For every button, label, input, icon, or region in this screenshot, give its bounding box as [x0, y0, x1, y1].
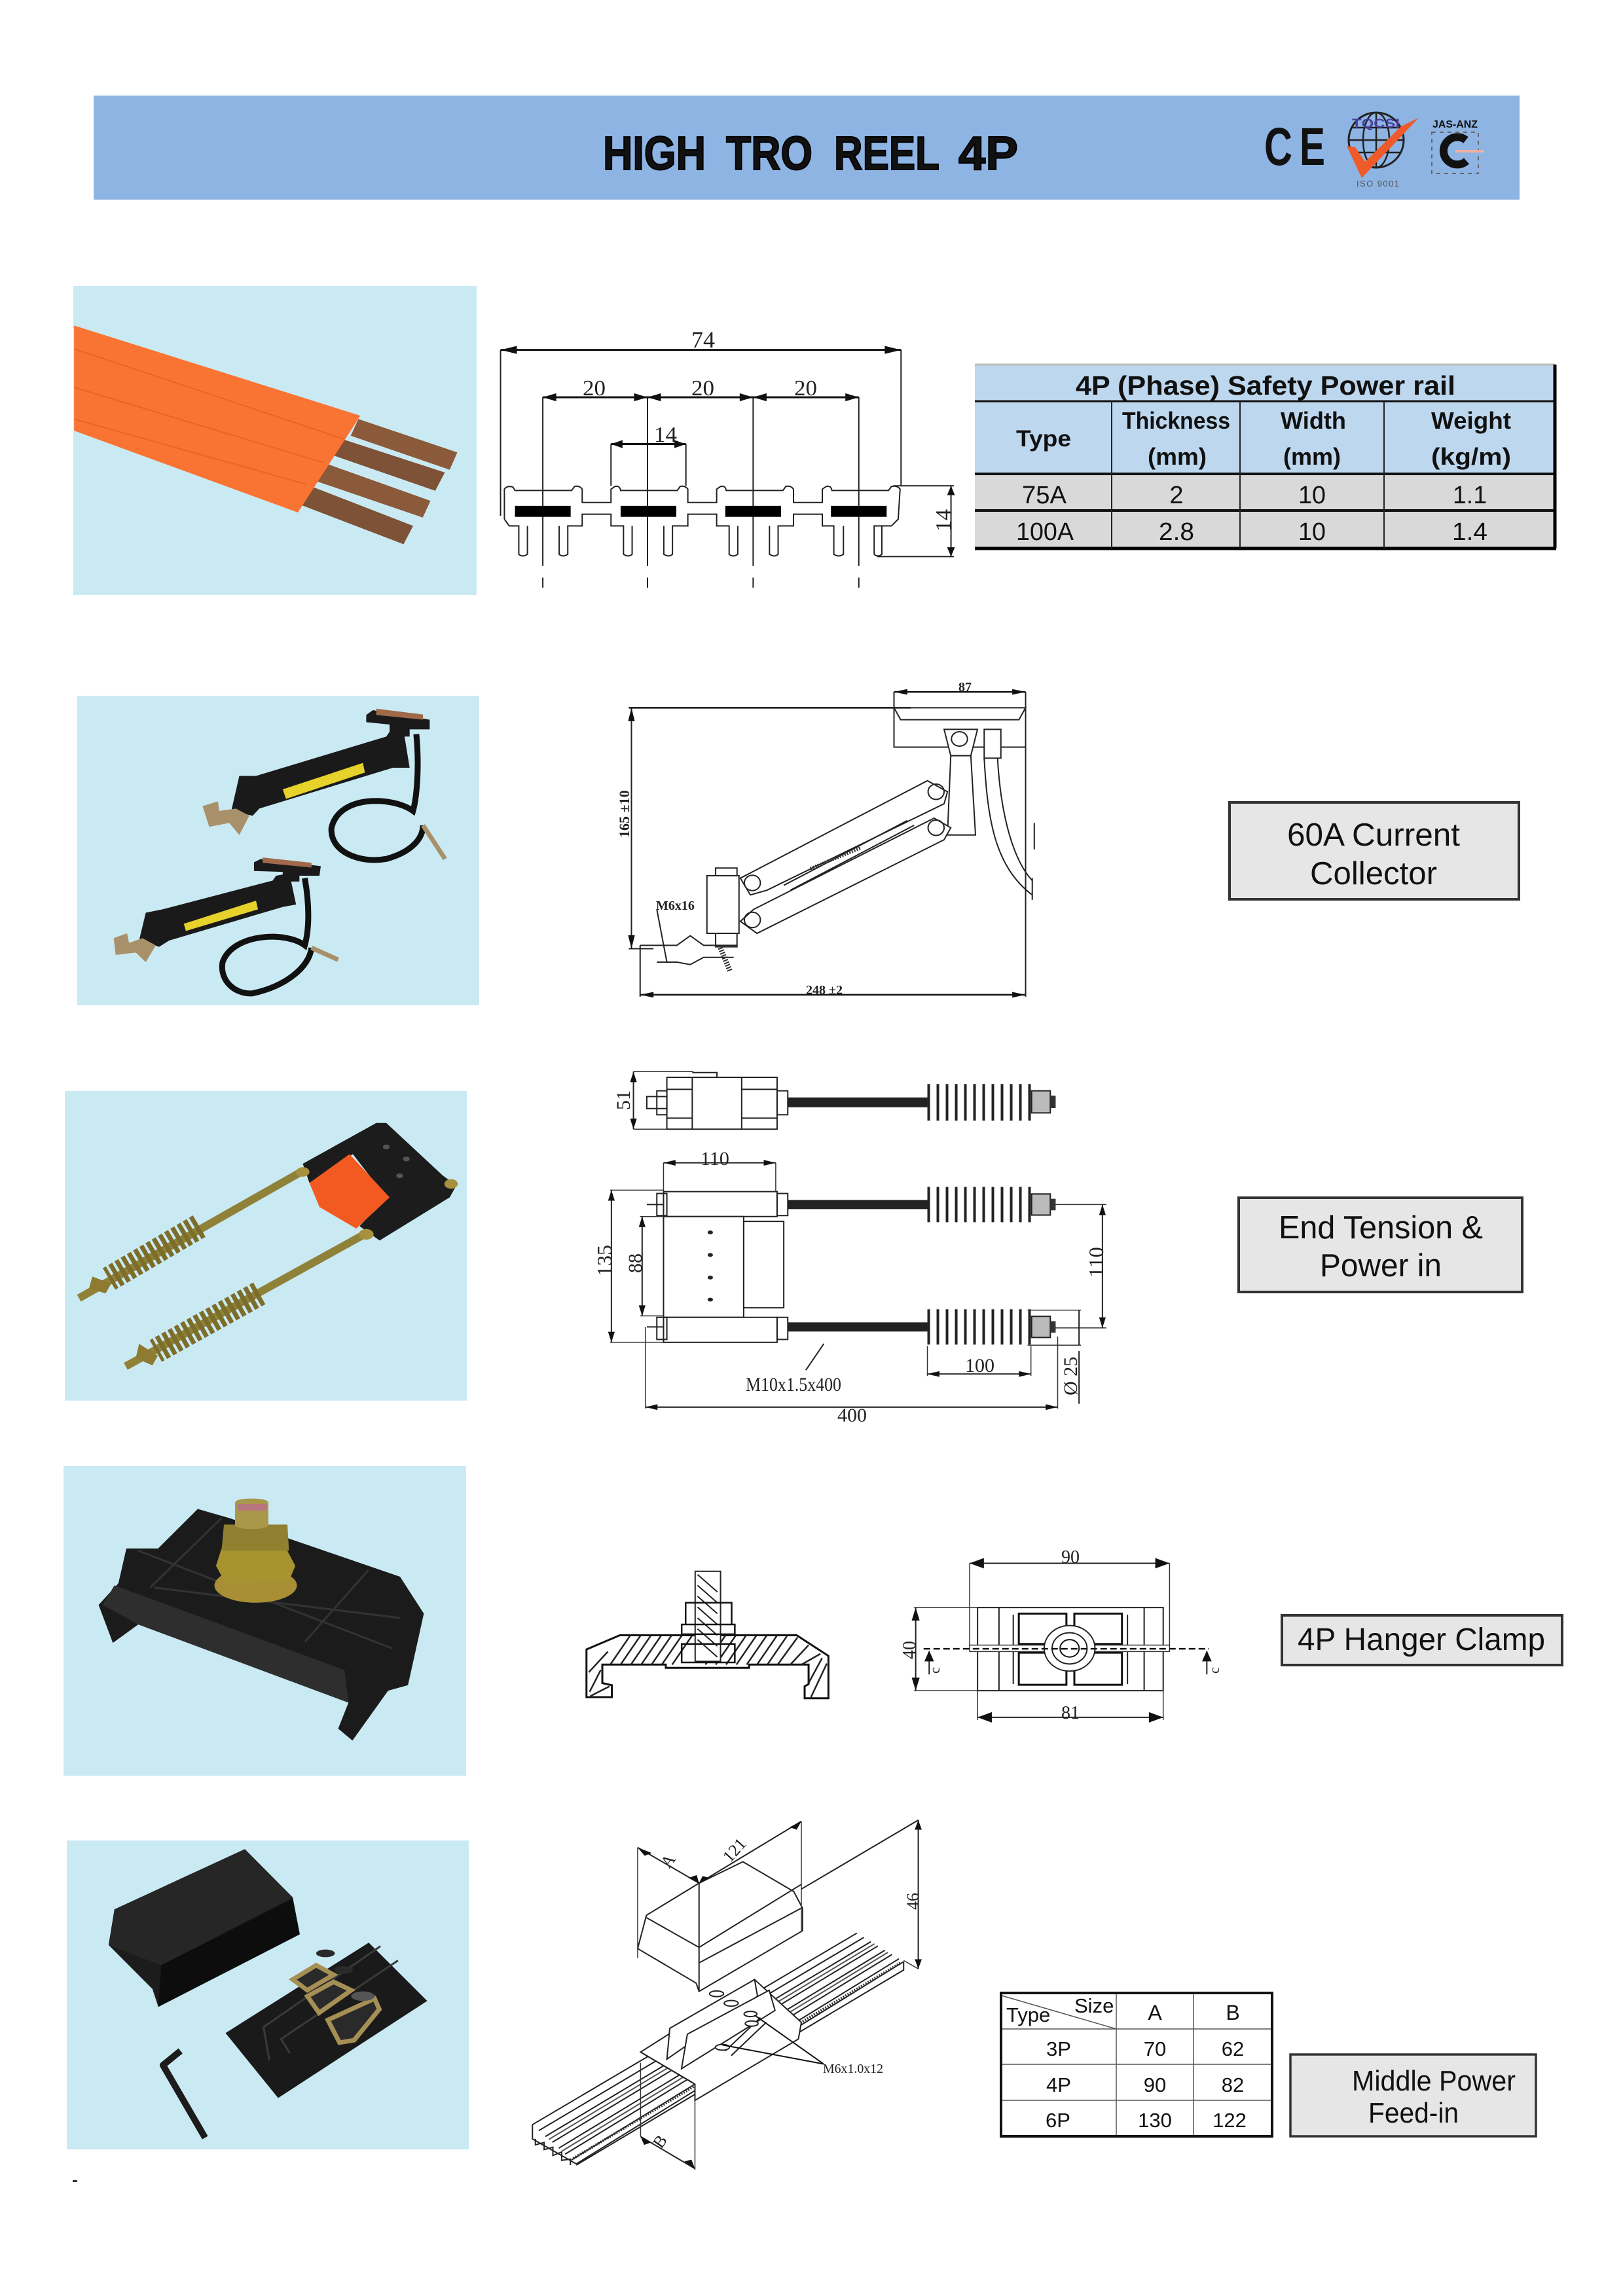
drawing: end tension dimensions: M10x1.5x400 [746, 1374, 841, 1395]
panel: end tension photo [65, 1091, 467, 1401]
callout: End Tension and Power in: End Tension & [1279, 1210, 1483, 1246]
feed-in plate [640, 1979, 801, 2100]
table column headers: Width [1281, 407, 1346, 434]
table title: 4P (Phase) Safety Power rail [1076, 370, 1455, 401]
title: HIGH [603, 128, 706, 180]
drawing: end tension dimensions: 110 [701, 1148, 729, 1170]
drawing: hanger clamp plan view: 90 [1061, 1547, 1080, 1568]
icon: CE mark [1264, 117, 1325, 177]
drawing: power rail cross section with dimensions: 14 [654, 423, 677, 447]
table rows: 1.4 [1452, 518, 1487, 546]
table: size by type: 130 [1138, 2109, 1172, 2132]
callout: End Tension and Power in: Power in [1320, 1248, 1442, 1283]
drawing: power rail cross section with dimensions: 20 [583, 376, 606, 401]
panel: hanger clamp photo [64, 1466, 466, 1776]
dimension lines [638, 1821, 919, 2170]
table: size by type: 70 [1144, 2037, 1166, 2060]
icon: CE mark: E [1300, 117, 1325, 177]
drawing: end tension dimensions: 51 [613, 1090, 634, 1110]
table rows: 75A [1022, 482, 1067, 509]
drawing: end tension dimensions: 400 [837, 1405, 867, 1426]
table: size by type: 82 [1222, 2073, 1244, 2096]
drawing: end tension dimensions: 110 [1084, 1247, 1108, 1278]
table: size by type: 90 [1144, 2073, 1166, 2096]
callout: End Tension and Power in [1239, 1198, 1522, 1292]
callout: Middle Power Feed-in: Feed-in [1368, 2097, 1459, 2129]
table rows: 10 [1298, 518, 1326, 546]
icon: JAS-ANZ mark: JAS-ANZ [1432, 119, 1478, 130]
table: size by type: 122 [1213, 2109, 1247, 2132]
drawing: power rail cross section with dimensions: 20 [691, 376, 714, 401]
title: TRO [726, 128, 812, 180]
table column headers [1016, 407, 1511, 470]
drawing: power rail cross section with dimensions [501, 327, 956, 588]
table: size by type [1001, 1993, 1272, 2136]
drawing: current collector dimensions: M6x16 [656, 899, 695, 913]
drawing: middle power feed-in isometric: 121 [719, 1835, 750, 1866]
drawing: middle power feed-in isometric: M6x1.0x12 [823, 2062, 883, 2076]
callout: 4P Hanger Clamp [1282, 1615, 1562, 1665]
table: size by type: 62 [1222, 2037, 1244, 2060]
drawing: power rail cross section with dimensions: 74 [691, 327, 715, 353]
upper view [647, 1073, 1055, 1129]
drawing: end tension dimensions: 100 [965, 1355, 994, 1376]
panel: current collector photo [77, 696, 479, 1005]
header banner [94, 96, 1520, 200]
callout: 60A Current Collector: Collector [1310, 856, 1437, 891]
table column headers: Thickness [1122, 407, 1230, 434]
icon: TQCSI ISO 9001 globe and check [1347, 113, 1419, 188]
drawing: middle power feed-in isometric: 46 [903, 1893, 922, 1910]
table: 4P safety power rail [975, 365, 1556, 548]
table: size by type: 3P [1046, 2037, 1071, 2060]
drawing: end tension dimensions: 135 [593, 1245, 616, 1276]
drawing: end tension dimensions: Ø 25 [1060, 1357, 1082, 1395]
title: REEL [834, 128, 939, 180]
table rows: 2.8 [1159, 518, 1194, 546]
table rows: 100A [1016, 518, 1074, 546]
drawing: hanger clamp plan view: 81 [1061, 1703, 1080, 1723]
table column headers: Weight [1431, 407, 1511, 434]
table: size by type: B [1226, 2001, 1240, 2024]
cover [638, 1862, 803, 1992]
icon: JAS-ANZ mark [1432, 119, 1484, 173]
callout: 60A Current Collector: 60A Current [1287, 817, 1460, 853]
drawing: power rail cross section with dimensions: 20 [794, 376, 817, 401]
table: size by type: 6P [1046, 2109, 1070, 2132]
drawing: hanger clamp section [587, 1571, 828, 1698]
drawing: hanger clamp plan view: c [926, 1667, 943, 1674]
icon: TQCSI ISO 9001 globe and check: ISO 9001 [1357, 179, 1399, 188]
drawing: end tension dimensions [593, 1071, 1108, 1426]
table column headers: (mm) [1283, 443, 1341, 470]
drawing: current collector dimensions: 248 ±2 [806, 983, 843, 997]
drawing: hanger clamp plan view: c [1206, 1667, 1222, 1674]
table rows [1016, 482, 1487, 546]
title [603, 128, 1018, 180]
panel: power rail photo [73, 286, 477, 595]
table: size by type: Type [1006, 2003, 1050, 2026]
drawing: current collector dimensions [616, 680, 1034, 997]
table rows: 1.1 [1453, 482, 1487, 509]
drawing: hanger clamp plan view [900, 1547, 1222, 1723]
table: size by type: A [1148, 2001, 1162, 2024]
drawing: power rail cross section with dimensions: 14 [932, 509, 956, 531]
footnote mark [73, 2180, 77, 2182]
lower view [647, 1192, 1055, 1342]
icon: CE mark: C [1264, 117, 1292, 177]
callout: Middle Power Feed-in [1290, 2054, 1536, 2136]
callout: 60A Current Collector [1230, 802, 1519, 899]
table rows: 10 [1298, 482, 1326, 509]
table rows: 2 [1169, 482, 1184, 509]
drawing: middle power feed-in isometric [532, 1820, 922, 2170]
table column headers: Type [1016, 426, 1071, 452]
callout: Middle Power Feed-in: Middle Power [1352, 2065, 1516, 2097]
table: size by type: Size [1074, 1994, 1114, 2017]
callout: 4P Hanger Clamp: 4P Hanger Clamp [1298, 1623, 1545, 1657]
drawing: hanger clamp plan view: 40 [900, 1641, 920, 1659]
title: 4P [958, 128, 1018, 180]
drawing: current collector dimensions: 165 ±10 [616, 790, 632, 838]
panel: middle power feed-in photo [67, 1840, 469, 2149]
icon: TQCSI ISO 9001 globe and check: TQCSI [1352, 117, 1400, 131]
drawing: middle power feed-in isometric: B [649, 2132, 671, 2151]
table column headers: (kg/m) [1431, 443, 1511, 470]
drawing: end tension dimensions: 88 [625, 1253, 646, 1273]
rail [532, 1933, 903, 2165]
table: size by type: 4P [1046, 2073, 1071, 2096]
drawing: current collector dimensions: 87 [958, 680, 972, 694]
drawing: middle power feed-in isometric: A [657, 1850, 680, 1871]
table column headers: (mm) [1148, 443, 1207, 470]
